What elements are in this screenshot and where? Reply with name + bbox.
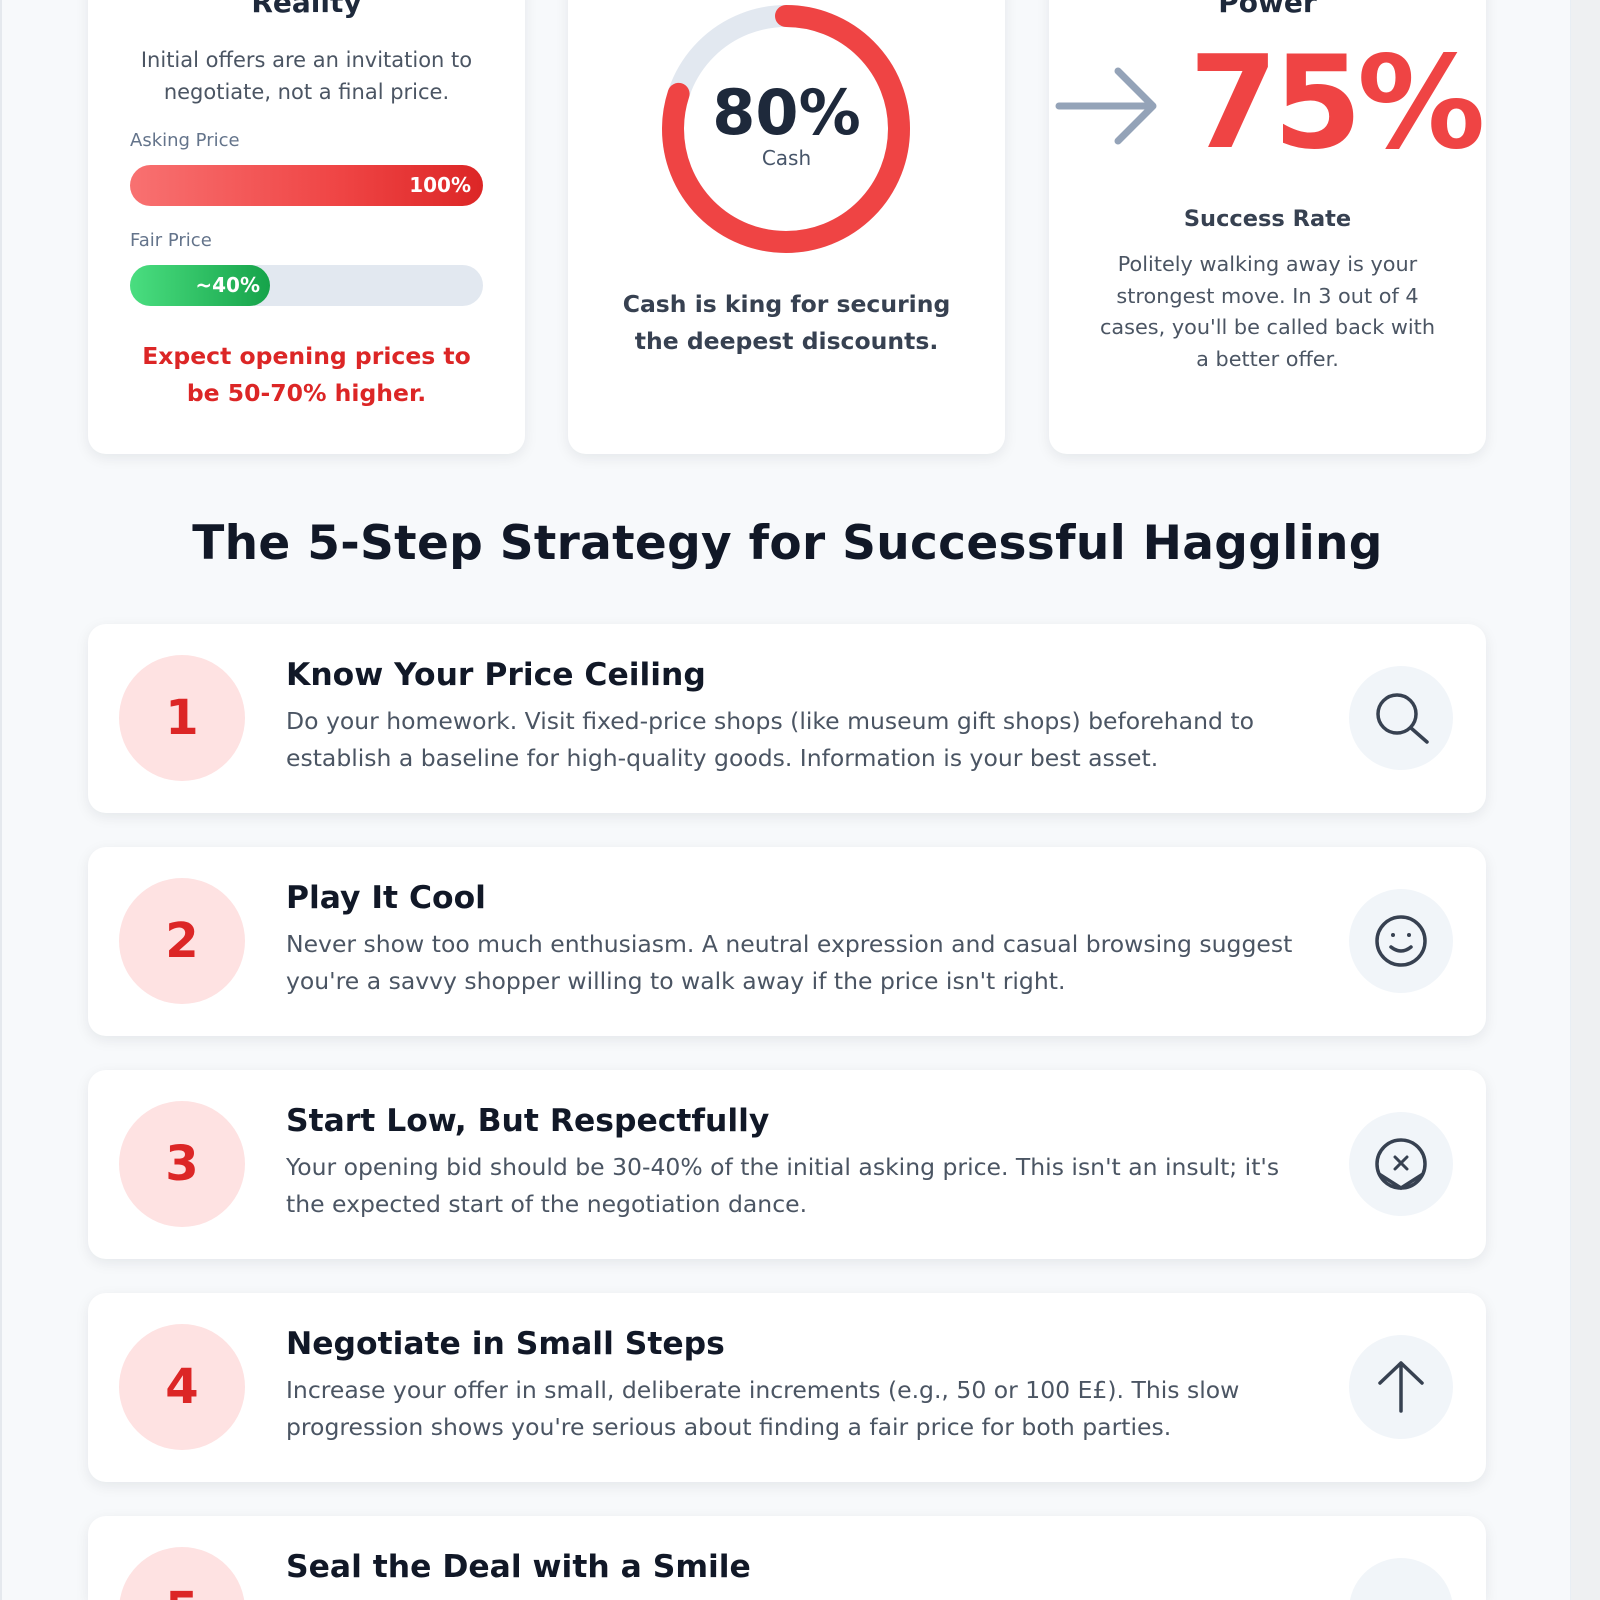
number 4: 4 — [165, 1359, 199, 1415]
step desc 4: progression shows you're serious about finding a fair price for both parties. — [286, 1413, 1171, 1441]
number 3 — [119, 1101, 245, 1227]
bar: asking price 100%: 100% — [409, 173, 471, 197]
stat: 80%: 80% — [712, 76, 861, 149]
number 5 — [119, 1547, 245, 1600]
step 2 — [88, 847, 1486, 1036]
stat: 75%: 75% — [1189, 29, 1480, 178]
step title 5: Seal the Deal with a Smile — [286, 1549, 751, 1585]
text: walk-away description: Politely walking away is your — [1118, 252, 1417, 276]
text: walk-away description: a better offer. — [1196, 347, 1339, 371]
step desc 4 — [286, 1376, 1239, 1441]
bar: fair price 40%: ~40% — [195, 273, 260, 297]
step title 3: Start Low, But Respectfully — [286, 1103, 769, 1139]
icon: handshake badge — [1349, 1112, 1453, 1216]
donut chart: 80% cash — [662, 5, 910, 253]
label: success rate: Success Rate — [1184, 206, 1351, 232]
text: walk-away description: strongest move. In 3 out of 4 — [1116, 284, 1419, 308]
bar: fair price 40% — [130, 265, 483, 306]
step 5 — [88, 1516, 1486, 1600]
number 2: 2 — [165, 913, 199, 969]
number 1: 1 — [165, 690, 199, 746]
callout: opening prices — [142, 342, 471, 407]
title: The 5-Step Strategy for Successful Haggling — [192, 516, 1383, 571]
step desc 2: you're a savvy shopper willing to walk away if the price isn't right. — [286, 967, 1065, 995]
step desc 3 — [286, 1153, 1279, 1218]
text: walk-away description — [1100, 252, 1435, 371]
panel: walk-away power — [1049, 0, 1486, 454]
label: cash: Cash — [762, 146, 811, 170]
step title 4: Negotiate in Small Steps — [286, 1326, 725, 1362]
step desc 2: Never show too much enthusiasm. A neutral expression and casual browsing suggest — [286, 930, 1292, 958]
step 4 — [88, 1293, 1486, 1482]
text: cash is king: Cash is king for securing — [623, 290, 950, 318]
number 3: 3 — [165, 1136, 199, 1192]
step desc 4: Increase your offer in small, deliberate increments (e.g., 50 or 100 E£). This slow — [286, 1376, 1239, 1404]
callout: opening prices: Expect opening prices to — [142, 342, 471, 370]
bar: asking price 100% — [130, 165, 483, 206]
panel: reality — [88, 0, 525, 454]
number 2 — [119, 878, 245, 1004]
text: reality description: Initial offers are an invitation to — [141, 48, 472, 72]
step desc 2 — [286, 930, 1292, 995]
step desc 3: Your opening bid should be 30-40% of the initial asking price. This isn't an insult; it's — [286, 1153, 1279, 1181]
icon: smile — [1349, 889, 1453, 993]
step 1 — [88, 624, 1486, 813]
icon: step 5 — [1349, 1558, 1453, 1600]
step desc 1 — [286, 707, 1254, 772]
step desc 1: establish a baseline for high-quality goods. Information is your best asset. — [286, 744, 1158, 772]
step title 2: Play It Cool — [286, 880, 486, 916]
label: fair price: Fair Price — [130, 230, 212, 251]
text: reality description — [141, 48, 472, 104]
text: reality description: negotiate, not a final price. — [164, 80, 449, 104]
step title 1: Know Your Price Ceiling — [286, 657, 706, 693]
text: cash is king — [623, 290, 950, 355]
text: cash is king: the deepest discounts. — [635, 327, 938, 355]
callout: opening prices: be 50-70% higher. — [187, 379, 426, 407]
number 4 — [119, 1324, 245, 1450]
text: walk-away description: cases, you'll be called back with — [1100, 315, 1435, 339]
step 3 — [88, 1070, 1486, 1259]
panel: cash — [568, 0, 1005, 454]
icon: arrow up — [1349, 1335, 1453, 1439]
icon: arrow right — [1056, 68, 1156, 144]
label: asking price: Asking Price — [130, 130, 240, 151]
step desc 3: the expected start of the negotiation dance. — [286, 1190, 807, 1218]
number 1 — [119, 655, 245, 781]
step desc 1: Do your homework. Visit fixed-price shops (like museum gift shops) beforehand to — [286, 707, 1254, 735]
icon: search — [1349, 666, 1453, 770]
